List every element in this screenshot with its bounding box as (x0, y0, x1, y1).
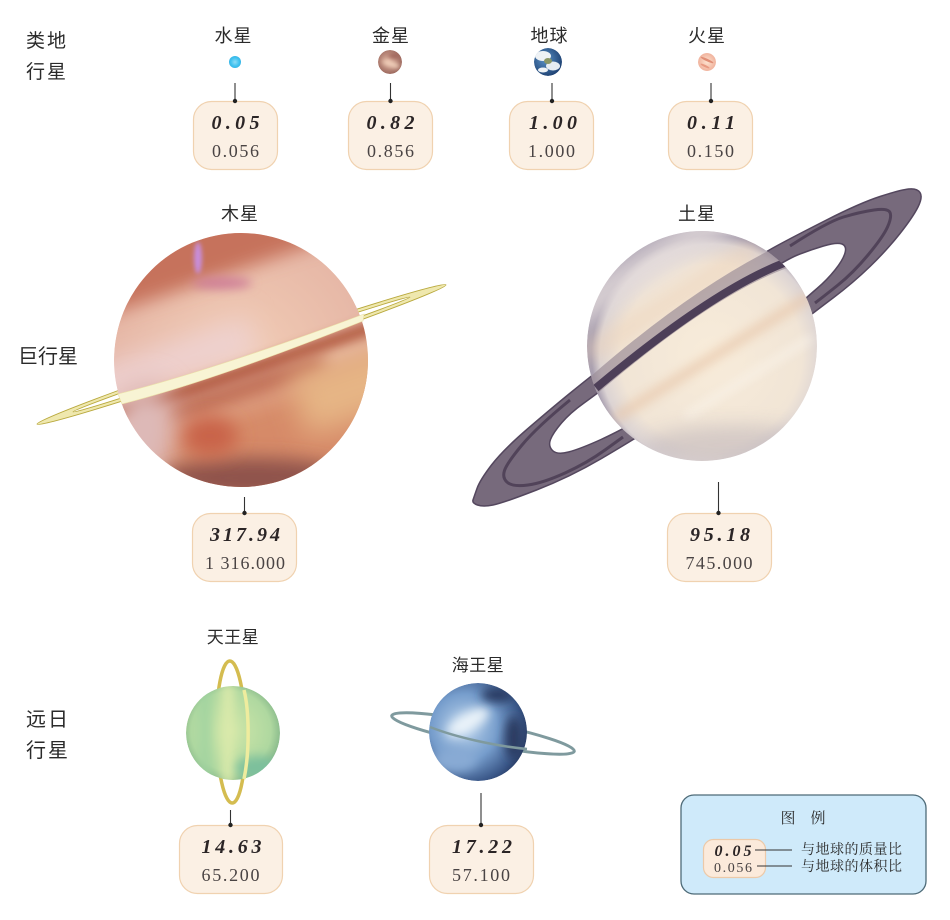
data box: Earth: 1.000 (528, 141, 575, 161)
globe: Jupiter (114, 233, 368, 487)
data box: Venus (348, 102, 432, 170)
connector (716, 482, 721, 515)
data box: Saturn (668, 514, 772, 582)
data box: Neptune: 57.100 (452, 865, 510, 885)
ring in front of Neptune (430, 727, 527, 749)
label: Venus: 金星 (372, 26, 410, 46)
connector (228, 810, 233, 827)
heading: ice giants: 远日 (26, 709, 70, 731)
legend text: mass ratio: 与地球的质量比 (801, 841, 902, 858)
planet group: Neptune (390, 656, 576, 894)
illustration: Uranus with ring (183, 661, 280, 803)
data box: Neptune: 17.22 (452, 836, 512, 858)
data box: Jupiter (192, 514, 296, 582)
connector (242, 497, 247, 515)
planet group: Mars (668, 26, 752, 170)
ring behind Uranus (215, 661, 247, 803)
data box: Uranus: 14.63 (202, 836, 262, 858)
label: Neptune: 海王星 (452, 656, 504, 675)
icon: Mercury (229, 56, 241, 68)
rings behind Saturn (473, 189, 921, 506)
label: Mercury: 水星 (214, 26, 252, 46)
connector (233, 83, 237, 103)
label: Earth: 地球 (530, 26, 568, 46)
planet group: Mercury (194, 26, 278, 170)
legend sample box: 0.05 (714, 843, 752, 860)
heading: terrestrial planets: 行星 (26, 61, 68, 83)
heading: ice giants: 行星 (26, 739, 70, 762)
legend sample box (704, 840, 766, 878)
connector (550, 83, 554, 103)
connector (479, 793, 483, 827)
connector (709, 83, 713, 103)
planet group: Uranus (180, 628, 282, 894)
label: Jupiter: 木星 (221, 204, 259, 224)
globe: Saturn (587, 231, 817, 461)
data box: Mars (668, 102, 752, 170)
data box: Venus: 0.856 (367, 141, 414, 161)
legend leader lines (755, 850, 792, 866)
label: Mars: 火星 (688, 26, 726, 46)
data box: Venus: 0.82 (366, 112, 414, 134)
data box: Mars: 0.150 (687, 141, 734, 161)
data box: Mercury: 0.056 (212, 141, 259, 161)
data box: Earth: 1.00 (529, 112, 577, 134)
icon: Venus (378, 50, 402, 74)
planet group: Saturn (473, 171, 921, 582)
label: Uranus: 天王星 (207, 628, 259, 647)
globe: Neptune (429, 683, 527, 781)
data box: Mercury (194, 102, 278, 170)
data box: Saturn: 745.000 (686, 553, 752, 573)
legend title: 图 例 (780, 810, 826, 827)
legend text: volume ratio: 与地球的体积比 (801, 858, 902, 875)
data box: Neptune (430, 826, 534, 894)
data box: Jupiter: 1 316.000 (205, 553, 285, 573)
legend sample box: 0.056 (714, 861, 752, 876)
data box: Mercury: 0.05 (212, 112, 260, 134)
illustration: Neptune with ring (390, 683, 576, 781)
data box: Jupiter: 317.94 (209, 524, 280, 546)
data box: Mars: 0.11 (687, 112, 735, 134)
ring behind Jupiter (35, 278, 448, 431)
ring front band over Saturn (590, 250, 787, 393)
icon: Earth (534, 48, 562, 76)
ring in front of Uranus (244, 690, 248, 779)
icon: Mars (698, 53, 716, 71)
ring in front of Jupiter (118, 314, 364, 404)
heading: terrestrial planets: 类地 (26, 31, 68, 52)
data box: Earth (510, 102, 594, 170)
planet group: Jupiter (36, 204, 446, 582)
legend panel (681, 795, 926, 894)
illustration: Saturn with rings (473, 171, 921, 506)
data box: Saturn: 95.18 (690, 524, 750, 546)
ring behind Neptune (390, 705, 576, 762)
label: Saturn: 土星 (678, 204, 716, 224)
connector (388, 83, 393, 103)
data box: Uranus (180, 826, 282, 894)
globe: Uranus (183, 684, 280, 784)
illustration: Jupiter with ring (36, 233, 446, 487)
heading: giant planets: 巨行星 (18, 345, 78, 368)
data box: Uranus: 65.200 (202, 865, 260, 885)
planet group: Venus (348, 26, 432, 170)
planet group: Earth (510, 26, 594, 170)
